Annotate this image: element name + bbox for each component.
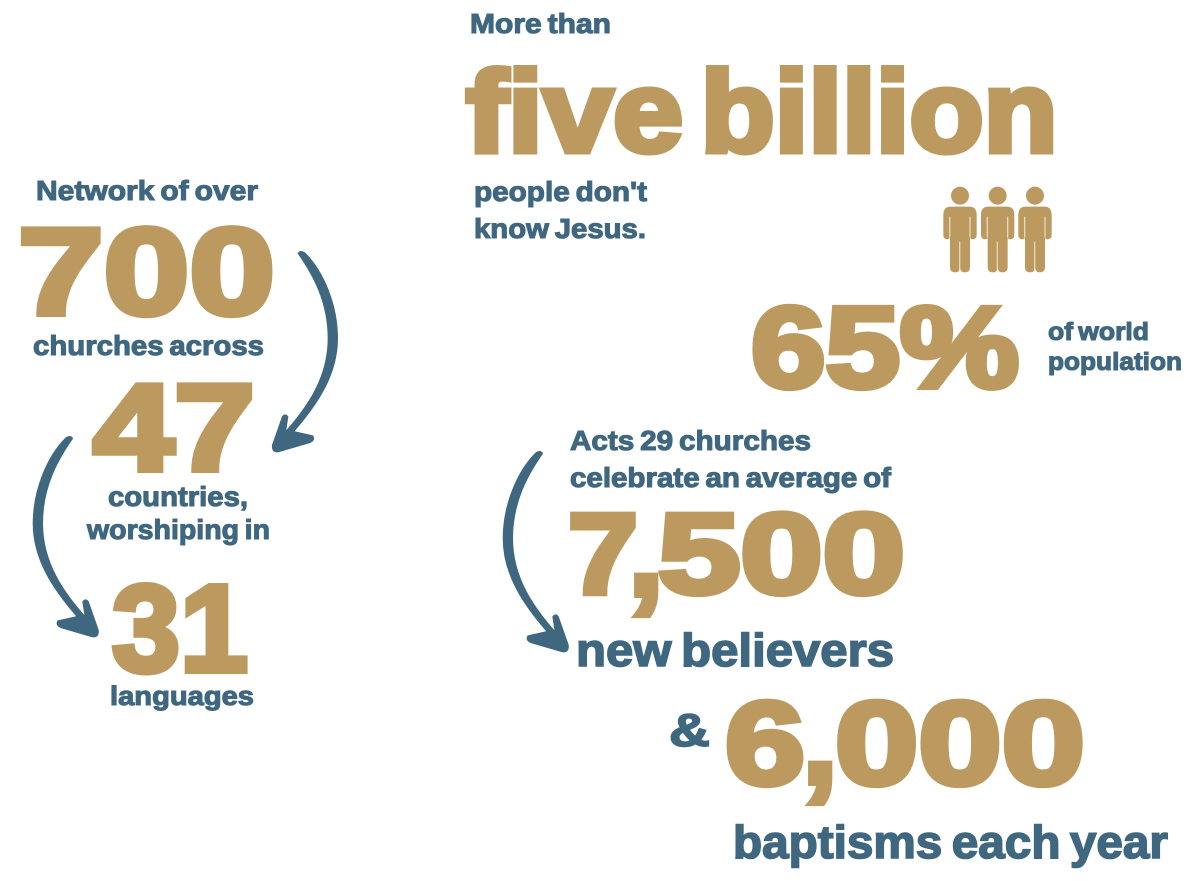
panel: new believers and baptisms [503, 425, 1168, 868]
number: 7,500: 500 [658, 491, 905, 618]
text: of world population [1048, 318, 1182, 376]
text: baptisms each year: baptisms each year [733, 816, 1168, 868]
number: 6,000: 000 [835, 678, 1085, 810]
text: more than: More than [470, 8, 611, 39]
text: people don't know Jesus [474, 176, 647, 244]
number: 65%: 65% [751, 284, 1019, 412]
text: acts 29 churches celebrate an average of: Acts 29 churches [570, 425, 811, 456]
arrow: acts 29 to new believers [503, 452, 568, 652]
number: 7,500: 7 [568, 491, 638, 618]
panel: unreached people [466, 8, 1182, 412]
text: of world population: population [1048, 348, 1182, 376]
icon: three people [943, 187, 1052, 272]
heading: five billion: billion [701, 48, 1058, 176]
text: people don't know Jesus: know Jesus. [474, 213, 646, 244]
number: 700: 700 [18, 204, 275, 341]
text: people don't know Jesus: people don't [474, 176, 647, 207]
text: new believers: new believers [576, 624, 894, 676]
text: languages: languages [110, 681, 254, 711]
text: ampersand: & [669, 704, 710, 756]
heading: network of over: Network of over [36, 175, 258, 206]
heading: five billion [466, 48, 1058, 176]
number: 47: 47 [93, 360, 255, 497]
text: acts 29 churches celebrate an average of [570, 425, 892, 493]
number: 31: 31 [112, 561, 248, 698]
text: churches across: churches across [33, 330, 264, 361]
number: 6,000 [725, 665, 1085, 811]
text: countries, worshiping in: countries, [108, 481, 248, 512]
number: 7,500 [568, 477, 905, 623]
text: countries, worshiping in: worshiping in [86, 514, 270, 545]
number: 6,000: 6 [725, 678, 805, 810]
text: countries, worshiping in [86, 481, 270, 545]
panel: global church network [18, 175, 337, 711]
number: 6,000: , [802, 665, 838, 811]
number: 7,500: , [628, 477, 664, 623]
arrow: 47 to 31 [33, 437, 98, 637]
text: acts 29 churches celebrate an average of: celebrate an average of [570, 462, 892, 493]
arrow: 700 to 47 [273, 252, 337, 452]
heading: five billion: five [466, 48, 683, 176]
text: of world population: of world [1048, 318, 1149, 346]
